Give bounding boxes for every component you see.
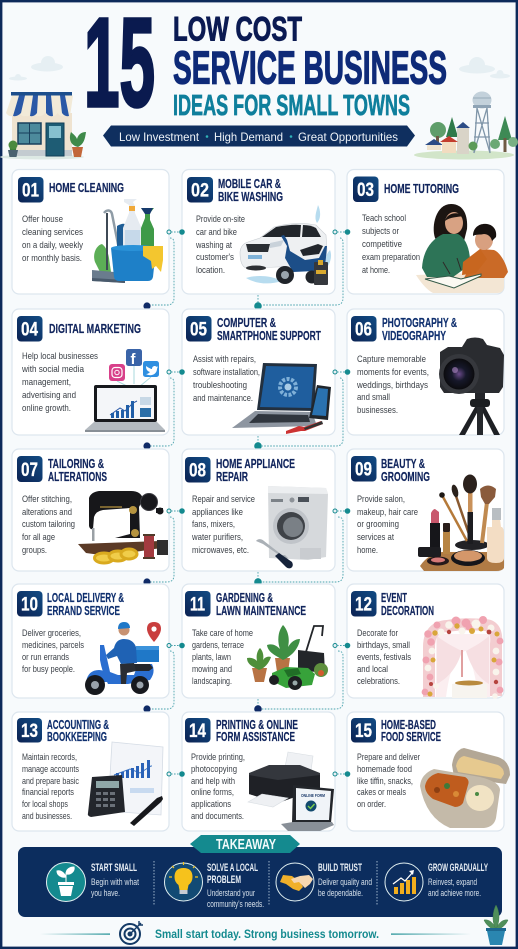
item: build trust <box>276 862 372 901</box>
icon: small town with water tower <box>414 92 518 160</box>
icon: calculator, report and pen <box>88 742 163 826</box>
description: car and bike <box>196 226 237 237</box>
heading <box>381 456 430 484</box>
badge 05 <box>186 316 212 342</box>
heading: HOME CLEANING <box>49 180 124 195</box>
description: Repair and service <box>192 493 255 504</box>
description: Offer stitching, <box>22 493 72 504</box>
heading: DECORATION <box>381 603 434 618</box>
panel: card 01 home cleaning <box>12 170 169 294</box>
icon: laptop with social media <box>85 349 165 432</box>
description <box>192 627 253 686</box>
heading: LAWN MAINTENANCE <box>216 603 306 618</box>
heading: ERRAND SERVICE <box>47 603 120 618</box>
panel: card 05 computer and smartphone support <box>182 309 335 435</box>
description <box>356 353 429 415</box>
connector dots row 5 <box>167 771 350 777</box>
badge 09: 09 <box>355 460 372 480</box>
icon: delivery scooter <box>85 622 161 695</box>
badge 03 <box>353 176 378 202</box>
text: START SMALL <box>91 862 137 874</box>
badge 07 <box>17 456 42 482</box>
description: groups. <box>22 544 47 555</box>
description: online growth. <box>22 402 71 413</box>
description: Maintain records, <box>22 751 77 762</box>
text: Reinvest, expand <box>428 877 477 887</box>
heading: EVENT <box>381 590 407 605</box>
title line: low cost: LOW COST <box>173 10 302 48</box>
heading: FOOD SERVICE <box>381 729 441 744</box>
heading <box>381 717 441 744</box>
text: PROBLEM <box>207 874 241 886</box>
panel: card 09 beauty and grooming <box>347 449 504 571</box>
heading: GROOMING <box>381 469 430 484</box>
heading: HOME APPLIANCE <box>216 456 295 471</box>
panel: card 14 printing and online form assistance <box>182 712 335 831</box>
text: Begin with what <box>91 877 139 887</box>
description: Assist with repairs, <box>193 353 256 364</box>
badge 04: 04 <box>21 320 38 340</box>
heading <box>216 717 298 744</box>
connectors between cards <box>143 238 343 713</box>
icon: cleaning supplies <box>92 199 163 283</box>
description: Deliver groceries, <box>22 627 81 638</box>
description: fans, mixers, <box>192 518 235 529</box>
description: medicines, parcels <box>22 639 84 650</box>
badge 01: 01 <box>22 180 39 202</box>
description: and maintenance. <box>193 392 253 403</box>
description: Prepare and deliver <box>357 751 420 762</box>
icon: tiffin box with food <box>420 748 510 828</box>
badge 06 <box>351 316 376 342</box>
description: Offer house <box>22 213 63 224</box>
description: troubleshooting <box>193 379 247 390</box>
badge 08: 08 <box>189 460 206 482</box>
description: moments for events, <box>357 366 429 377</box>
description <box>357 751 420 809</box>
text: be dependable. <box>318 888 363 898</box>
description: makeup, hair care <box>357 506 418 517</box>
icon: target <box>120 921 143 944</box>
heading: HOME-BASED <box>381 717 436 732</box>
panel: card 12 event decoration <box>347 584 504 699</box>
description: home. <box>357 544 378 555</box>
heading <box>381 590 434 618</box>
banner <box>103 126 415 146</box>
takeaway heading tab <box>190 835 300 853</box>
connector dots row 4 <box>167 643 350 648</box>
description: financial reports <box>22 786 74 797</box>
description: cakes or meals <box>357 786 406 797</box>
heading <box>218 176 283 204</box>
description: applications <box>191 798 231 809</box>
connector dots row 1 <box>167 229 350 235</box>
description: Provide printing, <box>191 751 245 762</box>
description: online forms, <box>191 786 234 797</box>
description: or grooming <box>357 518 399 529</box>
icon: clouds <box>9 56 510 80</box>
icon: potted plant <box>484 905 508 945</box>
heading: HOME TUTORING <box>384 181 459 196</box>
heading <box>216 590 306 618</box>
description: cleaning services <box>22 226 83 237</box>
connector dots row 3 <box>167 508 350 514</box>
item: start small <box>46 862 139 902</box>
heading: ACCOUNTING & <box>47 717 109 732</box>
banner: High Demand <box>214 130 283 144</box>
description <box>193 353 260 403</box>
panel: takeaway <box>18 835 502 917</box>
heading <box>216 456 295 484</box>
heading: BOOKKEEPING <box>47 729 107 744</box>
heading: BIKE WASHING <box>218 189 283 204</box>
banner: Great Opportunities <box>298 130 398 144</box>
description: water purifiers, <box>191 531 243 542</box>
description <box>362 212 420 275</box>
panel: card 06 photography and videography <box>347 309 504 435</box>
heading: REPAIR <box>216 469 248 484</box>
description: and prepare basic <box>22 775 79 786</box>
text: and achieve more. <box>428 888 481 898</box>
description: and small <box>357 391 390 402</box>
heading <box>217 315 321 343</box>
heading: PRINTING & ONLINE <box>216 717 298 732</box>
badge 06: 06 <box>355 320 372 340</box>
description: for all age <box>22 531 55 542</box>
badge 12 <box>351 591 376 616</box>
description: Teach school <box>362 212 406 223</box>
description: Take care of home <box>192 627 253 638</box>
icon: makeup and brushes <box>418 474 504 571</box>
description: and businesses. <box>22 810 72 821</box>
description: services at <box>357 531 394 542</box>
icon: handshake <box>276 863 314 901</box>
description <box>22 751 79 821</box>
description: for busy people. <box>22 663 75 674</box>
panel: card 13 accounting and bookkeeping <box>12 712 169 831</box>
text: SOLVE A LOCAL <box>207 862 258 874</box>
description: celebrations. <box>357 675 400 686</box>
description: events, festivals <box>357 651 411 662</box>
description <box>21 350 98 413</box>
panel: card 02 mobile car and bike washing <box>182 170 335 294</box>
description: appliances like <box>192 506 243 517</box>
description: Provide salon, <box>357 493 405 504</box>
icon: light bulb <box>164 862 202 901</box>
panel: card 04 digital marketing <box>12 309 169 435</box>
description: with social media <box>21 363 85 374</box>
heading: TAILORING & <box>48 456 104 471</box>
description <box>357 493 418 555</box>
text: you have. <box>91 888 120 898</box>
description <box>22 493 75 555</box>
description: subjects or <box>362 225 399 236</box>
heading: DIGITAL MARKETING <box>49 321 141 336</box>
item: grow gradually <box>385 862 488 901</box>
panel: card 08 home appliance repair <box>182 449 335 571</box>
icon: tutor and child <box>416 204 508 293</box>
description: plants, lawn <box>192 651 231 662</box>
heading: SMARTPHONE SUPPORT <box>217 328 321 343</box>
badge 11 <box>185 591 210 616</box>
heading: PHOTOGRAPHY & <box>382 315 457 330</box>
badge 01 <box>18 177 44 202</box>
icon: laptop with social media: f <box>130 351 136 368</box>
icon: storefront <box>0 92 86 160</box>
heading: MOBILE CAR & <box>218 176 281 191</box>
heading: GARDENING & <box>216 590 273 605</box>
description: alterations and <box>22 506 72 517</box>
description: management, <box>22 376 71 387</box>
heading <box>48 456 107 484</box>
description: Decorate for <box>357 627 398 638</box>
text <box>318 862 372 898</box>
item: solve a local problem <box>164 862 264 909</box>
description: landscaping. <box>192 675 232 686</box>
heading: ALTERATIONS <box>48 469 107 484</box>
footer tagline: Small start today. Strong business tomorrow. <box>155 927 379 941</box>
description: washing at <box>195 239 232 250</box>
icon: laptop and phone <box>232 363 331 434</box>
heading <box>47 717 109 744</box>
heading: LOCAL DELIVERY & <box>47 590 124 605</box>
icon: growth bars <box>385 863 423 901</box>
description: and documents. <box>191 810 244 821</box>
description <box>357 627 411 686</box>
badge 05: 05 <box>190 320 207 340</box>
description: Capture memorable <box>357 353 426 364</box>
text <box>91 862 139 898</box>
description: microwaves, etc. <box>192 544 249 555</box>
description: Help local businesses <box>22 350 98 361</box>
description: exam preparation <box>362 251 420 262</box>
icon: printer and laptop with online form <box>248 752 334 831</box>
badge 07: 07 <box>21 460 38 481</box>
icon: seedling <box>46 862 86 902</box>
icon: washing machine and tools <box>256 486 328 568</box>
description: or monthly basis. <box>22 252 82 263</box>
badge 04 <box>17 316 42 342</box>
description: birthdays, small <box>357 639 410 650</box>
description: on a daily, weekly <box>22 239 83 250</box>
description: businesses. <box>357 404 398 415</box>
heading: VIDEOGRAPHY <box>382 328 446 343</box>
panel: card 10 local delivery and errand service <box>12 584 169 698</box>
icon: printer and laptop with online form: ONLINE FORM <box>301 793 325 798</box>
description <box>191 751 245 821</box>
footer line right <box>391 934 471 935</box>
description: like tiffin, snacks, <box>357 775 413 786</box>
description <box>191 493 255 555</box>
badge 15: 15 <box>355 721 372 742</box>
title <box>84 0 447 133</box>
description: weddings, birthdays <box>356 379 428 390</box>
description: or run errands <box>22 651 69 662</box>
badge 02: 02 <box>191 180 209 202</box>
description: homemade food <box>357 763 412 774</box>
description: customer's <box>196 251 234 262</box>
heading: COMPUTER & <box>217 315 276 330</box>
badge 08 <box>185 457 210 482</box>
icon: camera on tripod <box>439 338 504 435</box>
text: BUILD TRUST <box>318 862 362 874</box>
description: on order. <box>357 798 386 809</box>
description: location. <box>196 264 225 275</box>
panel: card 03 home tutoring <box>347 170 508 294</box>
panel: card 07 tailoring and alterations <box>12 449 169 571</box>
connector dots row 2 <box>167 369 350 375</box>
text <box>207 862 264 909</box>
text: community's needs. <box>207 899 264 909</box>
description: software installation, <box>193 366 260 377</box>
description: for local shops <box>22 798 68 809</box>
badge 14: 14 <box>189 721 206 742</box>
badge 12: 12 <box>355 594 372 616</box>
description: at home. <box>362 264 390 275</box>
banner: Low Investment <box>119 130 200 144</box>
heading <box>382 315 457 343</box>
description: custom tailoring <box>22 518 75 529</box>
panel: card 15 home-based food service <box>347 712 510 831</box>
description: competitive <box>362 238 402 249</box>
takeaway heading tab: TAKEAWAY <box>216 837 276 853</box>
icon: balloon arch <box>422 616 503 699</box>
text: Understand your <box>207 888 255 898</box>
badge 03: 03 <box>357 180 374 201</box>
panel: card 11 gardening and lawn maintenance <box>182 584 335 698</box>
icon: car, scooter and pressure washer <box>240 205 331 285</box>
badge 10: 10 <box>21 594 38 616</box>
heading <box>47 590 124 618</box>
text: Deliver quality and <box>318 877 372 887</box>
badge 13: 13 <box>21 721 38 742</box>
description: photocopying <box>191 763 237 774</box>
text <box>428 862 488 898</box>
description: and help with <box>191 775 235 786</box>
badge 02 <box>187 177 213 202</box>
description: Provide on-site <box>196 213 245 224</box>
heading: BEAUTY & <box>381 456 425 471</box>
description: manage accounts <box>22 763 79 774</box>
description <box>195 213 245 275</box>
icon: plants and lawn mower <box>247 625 328 690</box>
badge 10 <box>17 591 42 616</box>
icon: sewing machine <box>78 491 168 563</box>
heading: FORM ASSISTANCE <box>216 729 295 744</box>
description: and local <box>357 663 388 674</box>
badge 09 <box>351 456 376 482</box>
description: mowing and <box>192 663 232 674</box>
footer line left <box>40 934 110 935</box>
badge 11: 11 <box>190 594 205 616</box>
description <box>22 213 83 263</box>
description: gardens, terrace <box>192 639 244 650</box>
description <box>22 627 84 674</box>
description: advertising and <box>22 389 76 400</box>
